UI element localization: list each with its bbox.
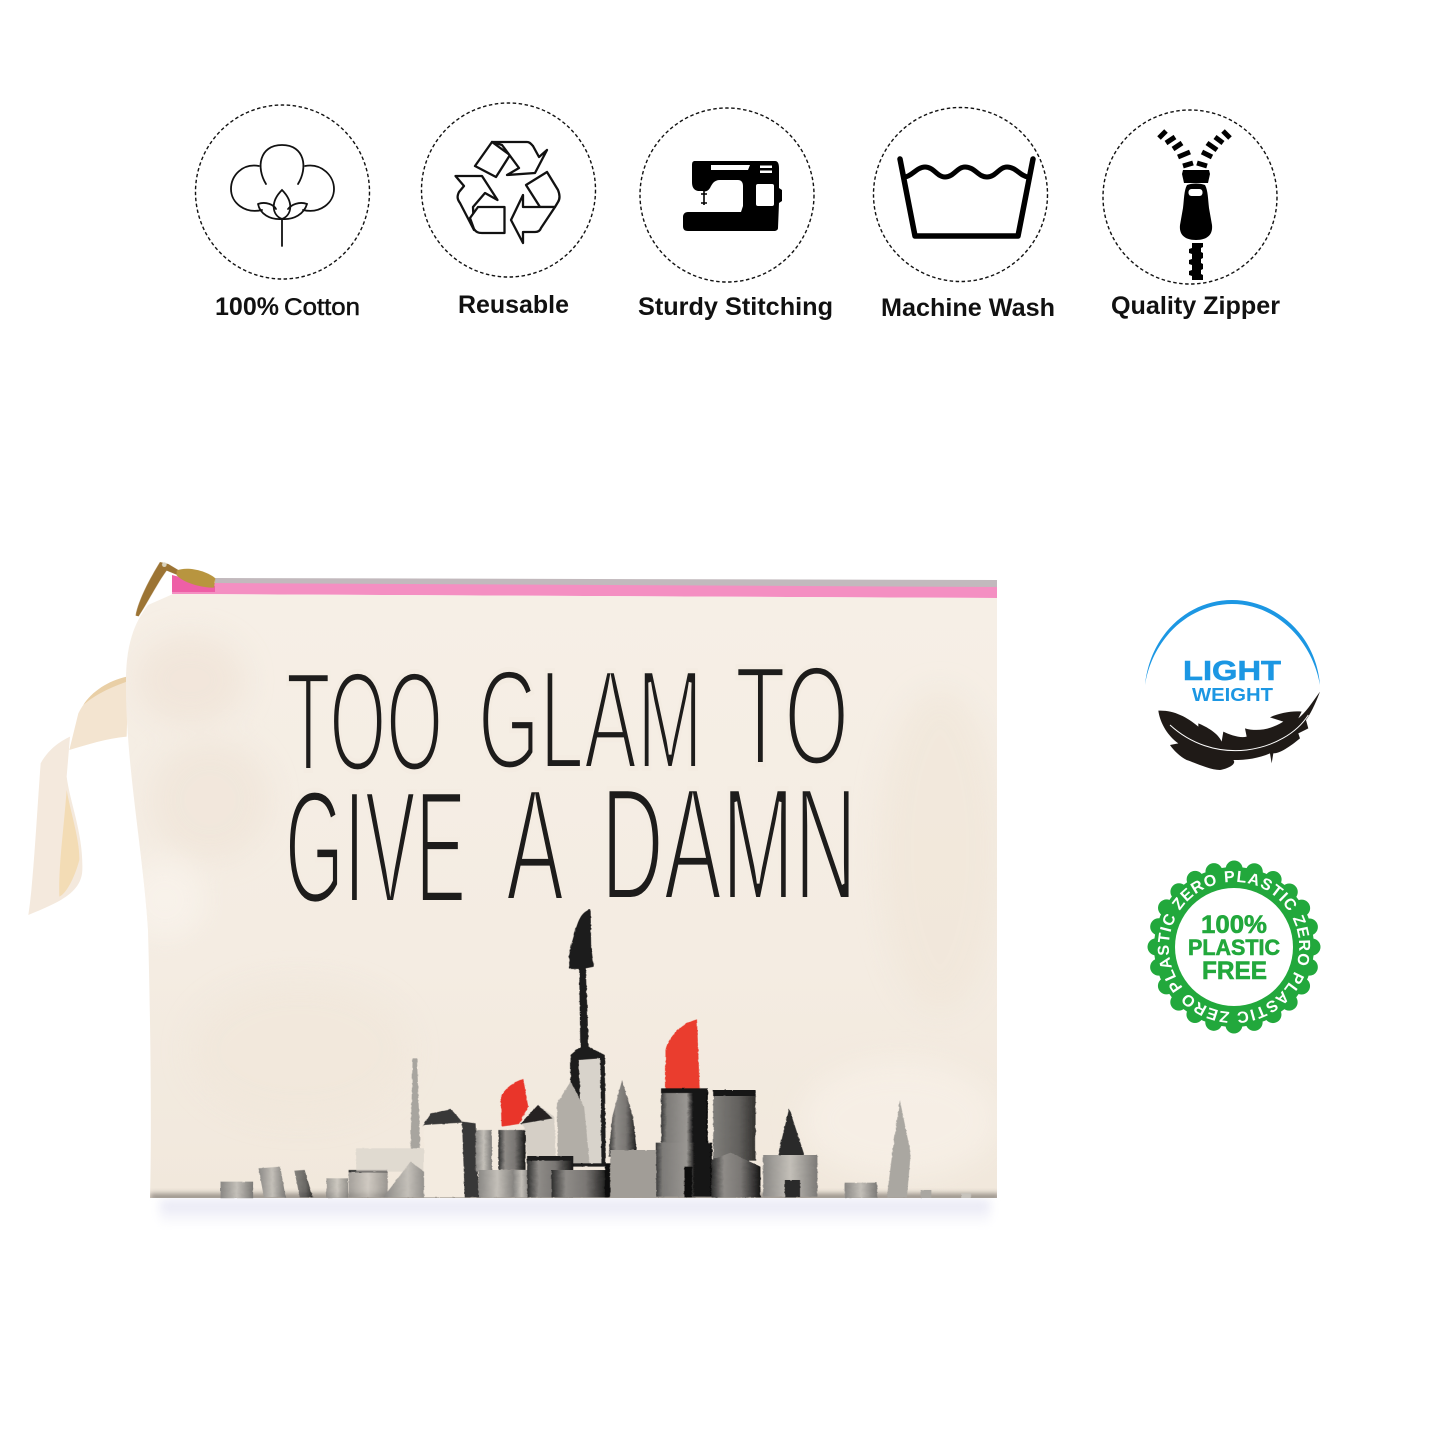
badge text: 100% — [1201, 911, 1267, 939]
label: reusable: Reusable — [458, 291, 569, 319]
skyline illustration — [221, 909, 971, 1198]
icon: wash tub — [900, 159, 1033, 236]
icon: zipper — [1159, 131, 1230, 280]
pointed tower — [608, 1080, 637, 1157]
wrist strap — [28, 677, 128, 915]
floor shadow — [160, 1200, 990, 1226]
zipper pull — [136, 562, 215, 616]
feature icon: machine wash — [874, 108, 1055, 322]
printed slogan: DAMN — [601, 754, 857, 934]
mascara tower — [557, 909, 606, 1167]
icon: recycle arrows — [456, 142, 560, 243]
blue arc — [1145, 600, 1320, 685]
badge text: WEIGHT — [1192, 685, 1273, 705]
fabric shading — [125, 635, 1000, 1200]
badge text — [1188, 911, 1280, 985]
feature icon: quality zipper — [1103, 110, 1280, 320]
feature icon: reusable — [422, 103, 596, 319]
product: canvas pouch — [28, 562, 1000, 1226]
central left tower — [422, 1109, 492, 1197]
badge text: PLASTIC — [1188, 935, 1280, 960]
printed slogan: TOO — [286, 642, 443, 802]
icon: cotton flower — [231, 145, 334, 246]
icon: feather — [1158, 692, 1320, 770]
printed slogan: TO — [735, 636, 849, 796]
label: sturdy stitching: Sturdy Stitching — [638, 293, 833, 321]
far left buildings — [221, 1058, 432, 1198]
badge text: FREE — [1202, 957, 1267, 985]
feature icon: sturdy stitching — [638, 108, 833, 321]
label: machine wash: Machine Wash — [881, 294, 1055, 322]
label: 100% cotton: 100% — [215, 293, 279, 321]
printed slogan: GIVE — [285, 758, 466, 938]
label: 100% cotton: Cotton — [284, 294, 360, 321]
left lipstick — [498, 1079, 556, 1170]
bag body — [126, 594, 997, 1198]
label: quality zipper: Quality Zipper — [1111, 292, 1280, 320]
green seal — [1154, 867, 1314, 1027]
circular text: PLASTIC ZERO PLASTIC ZERO PLASTIC ZERO — [1158, 870, 1310, 1023]
front low blocks — [478, 1150, 800, 1197]
right block — [712, 1090, 817, 1197]
icon: sewing machine — [683, 161, 782, 231]
feature icon: 100% cotton — [196, 105, 370, 321]
printed slogan: A — [506, 756, 564, 936]
badge text — [1183, 655, 1281, 705]
printed slogan: GLAM — [478, 640, 703, 800]
badge: light weight — [1145, 600, 1320, 770]
label: 100% cotton — [215, 293, 360, 321]
zipper tape — [172, 575, 997, 598]
printed slogan — [285, 636, 857, 938]
badge: 100% plastic free — [1148, 860, 1320, 1034]
badge text: LIGHT — [1183, 655, 1281, 686]
far right skyline — [845, 1100, 971, 1198]
right lipstick — [656, 1019, 712, 1197]
